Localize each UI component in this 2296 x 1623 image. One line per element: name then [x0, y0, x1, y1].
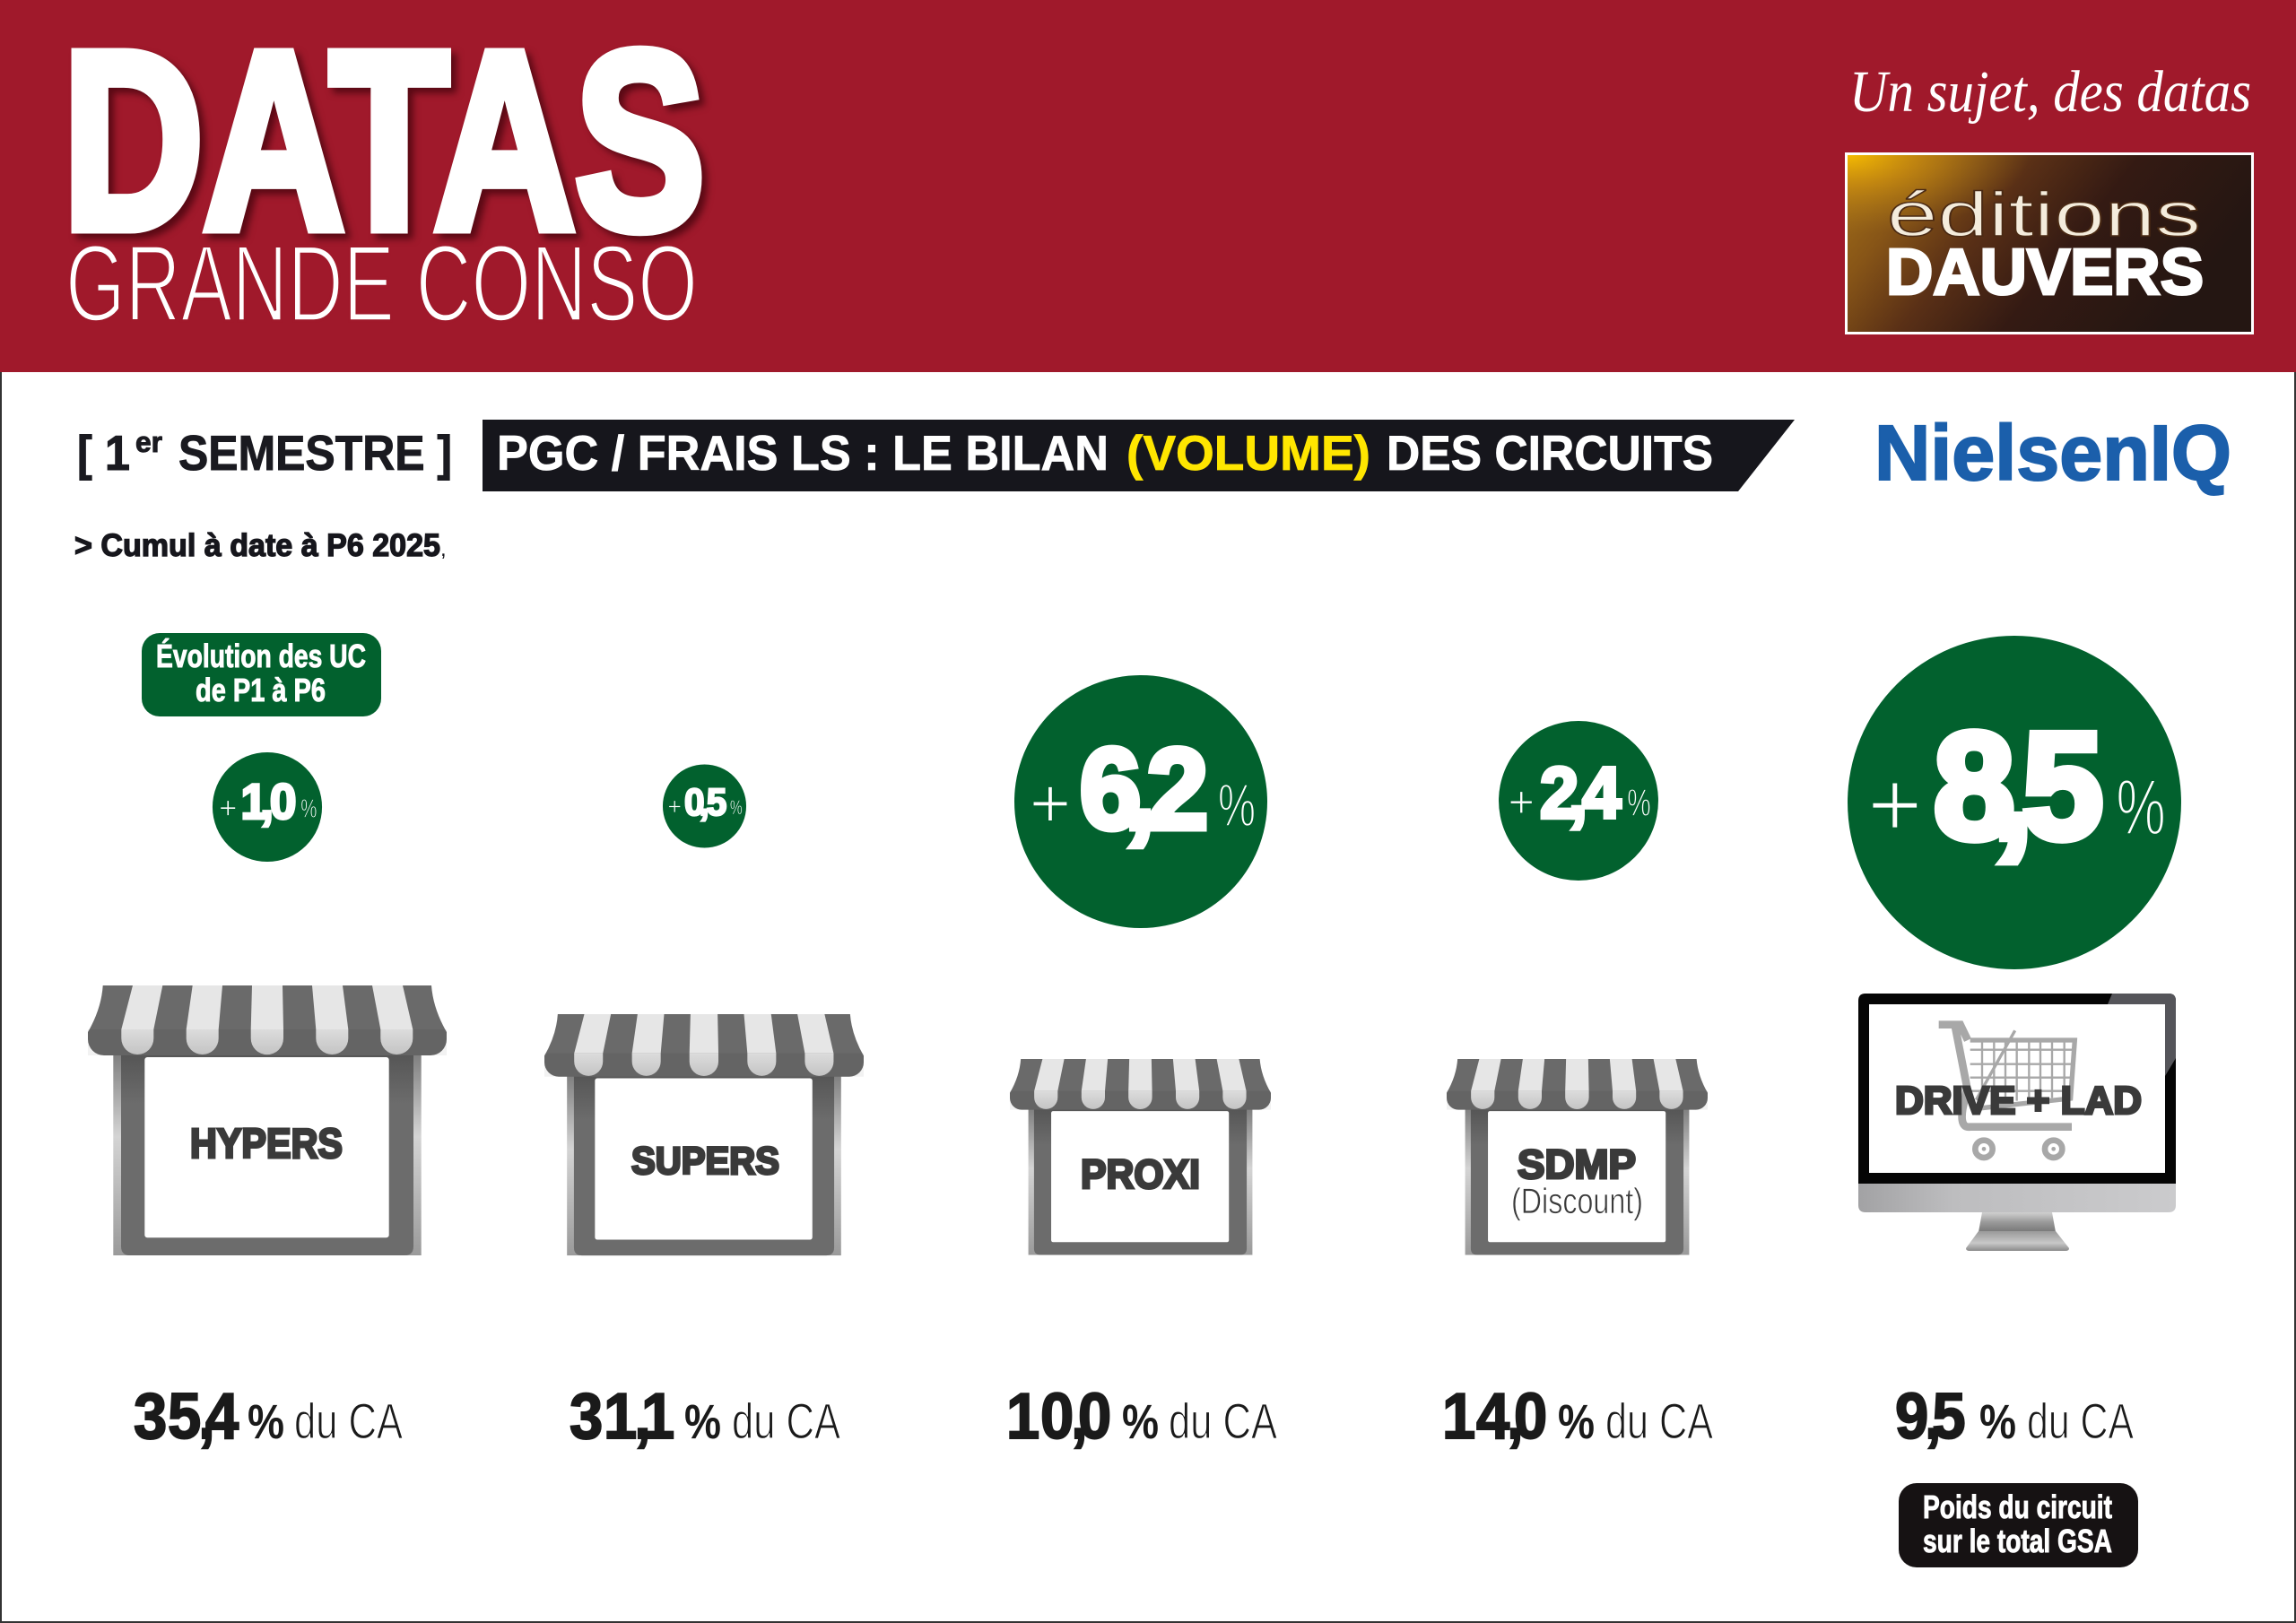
logo: NielsenIQ: NielsenIQ: [1874, 410, 2231, 497]
bubble: hypers +1,0 %: +: [219, 792, 237, 826]
bubble: sdmp +2,4 %: 2,4: [1540, 751, 1621, 833]
icon: store sdmp: SDMP: [1518, 1141, 1636, 1187]
stat: hypers share: %: [248, 1395, 284, 1449]
stat: hypers share: du CA: [294, 1393, 404, 1449]
stat: supers share: du CA: [732, 1393, 841, 1449]
stat: supers share: 31,1: [570, 1380, 674, 1453]
bubble: supers +0,5 %: [663, 764, 746, 848]
heading: 1er semestre: er: [135, 426, 162, 458]
legend badge: poids du circuit: [1899, 1483, 2138, 1567]
note: cumul: ,: [440, 537, 447, 561]
header band: [0, 0, 2296, 372]
bubble: drive +8,5 %: 8,5: [1934, 702, 2103, 871]
legend badge: évolution: [142, 633, 381, 716]
bubble: hypers +1,0 %: [213, 752, 322, 862]
heading: 1er semestre: SEMESTRE ]: [178, 425, 452, 481]
bubble: proxi +6,2 %: 6,2: [1080, 725, 1208, 854]
bubble: proxi +6,2 %: %: [1218, 772, 1256, 839]
heading: 1er semestre: [77, 425, 452, 481]
title banner: [483, 420, 1795, 491]
stat: sdmp share: du CA: [1605, 1393, 1713, 1449]
bubble: proxi +6,2 %: +: [1030, 763, 1071, 843]
stat: drive share: [1895, 1380, 2134, 1453]
icon: monitor drive + lad: [1858, 994, 2176, 1251]
icon: store proxi: [1010, 1059, 1271, 1255]
note: cumul: > Cumul à date à P6 2025: [74, 528, 440, 563]
stat: drive share: 9,5: [1895, 1380, 1966, 1453]
tagline: Un sujet, des datas: [1849, 59, 2251, 125]
stat: proxi share: du CA: [1169, 1393, 1278, 1449]
icon: store hypers: HYPERS: [190, 1120, 343, 1167]
bubble: drive +8,5 %: %: [2116, 763, 2166, 852]
stat: drive share: %: [1979, 1395, 2016, 1449]
stat: proxi share: [1006, 1380, 1278, 1453]
icon: store hypers: [88, 985, 447, 1255]
stat: proxi share: %: [1122, 1395, 1159, 1449]
stat: sdmp share: [1442, 1380, 1713, 1453]
icon: store sdmp: [1447, 1059, 1708, 1255]
icon: monitor drive + lad: DRIVE + LAD: [1895, 1079, 2142, 1123]
bubble: drive +8,5 %: [1848, 636, 2181, 969]
bubble: supers +0,5 %: %: [730, 796, 743, 819]
stat: supers share: %: [684, 1395, 721, 1449]
bubble: sdmp +2,4 %: [1499, 721, 1658, 881]
bubble: supers +0,5 %: 0,5: [684, 781, 726, 823]
logo: éditions Dauvers: éditions: [1887, 179, 2201, 249]
icon: store supers: [544, 1014, 864, 1255]
bubble: hypers +1,0 %: 1,0: [240, 774, 297, 829]
title banner: (VOLUME): [1126, 425, 1370, 481]
logo: éditions Dauvers: [1846, 154, 2253, 334]
heading: 1er semestre: [ 1: [77, 425, 130, 481]
legend badge: évolution: Évolution des UC: [156, 638, 366, 674]
bubble: sdmp +2,4 %: +: [1509, 776, 1535, 827]
stat: proxi share: 10,0: [1006, 1380, 1111, 1453]
title: DATAS: DATAS: [63, 0, 705, 282]
icon: store supers: SUPERS: [631, 1140, 779, 1183]
stat: hypers share: [134, 1380, 404, 1453]
icon: store sdmp: (Discount): [1511, 1182, 1643, 1221]
stat: hypers share: 35,4: [134, 1380, 239, 1453]
bubble: drive +8,5 %: +: [1867, 751, 1923, 857]
icon: shopping cart: [1939, 1025, 2074, 1158]
stat: sdmp share: 14,0: [1442, 1380, 1547, 1453]
stat: drive share: du CA: [2027, 1393, 2134, 1449]
stat: sdmp share: %: [1558, 1395, 1595, 1449]
title banner: PGC / FRAIS LS : LE BILAN: [497, 425, 1109, 481]
legend badge: poids du circuit: sur le total GSA: [1923, 1523, 2112, 1559]
bubble: hypers +1,0 %: %: [300, 795, 317, 824]
title banner: DES CIRCUITS: [1387, 425, 1713, 481]
stat: supers share: [570, 1380, 841, 1453]
logo: éditions Dauvers: DAUVERS: [1886, 237, 2204, 308]
icon: store proxi: PROXI: [1081, 1151, 1200, 1197]
subtitle: GRANDE CONSO: GRANDE CONSO: [65, 222, 698, 344]
legend badge: évolution: de P1 à P6: [196, 672, 326, 708]
bubble: supers +0,5 %: +: [667, 794, 682, 820]
bubble: proxi +6,2 %: [1014, 675, 1267, 928]
legend badge: poids du circuit: Poids du circuit: [1923, 1488, 2112, 1525]
bubble: sdmp +2,4 %: %: [1627, 782, 1651, 824]
